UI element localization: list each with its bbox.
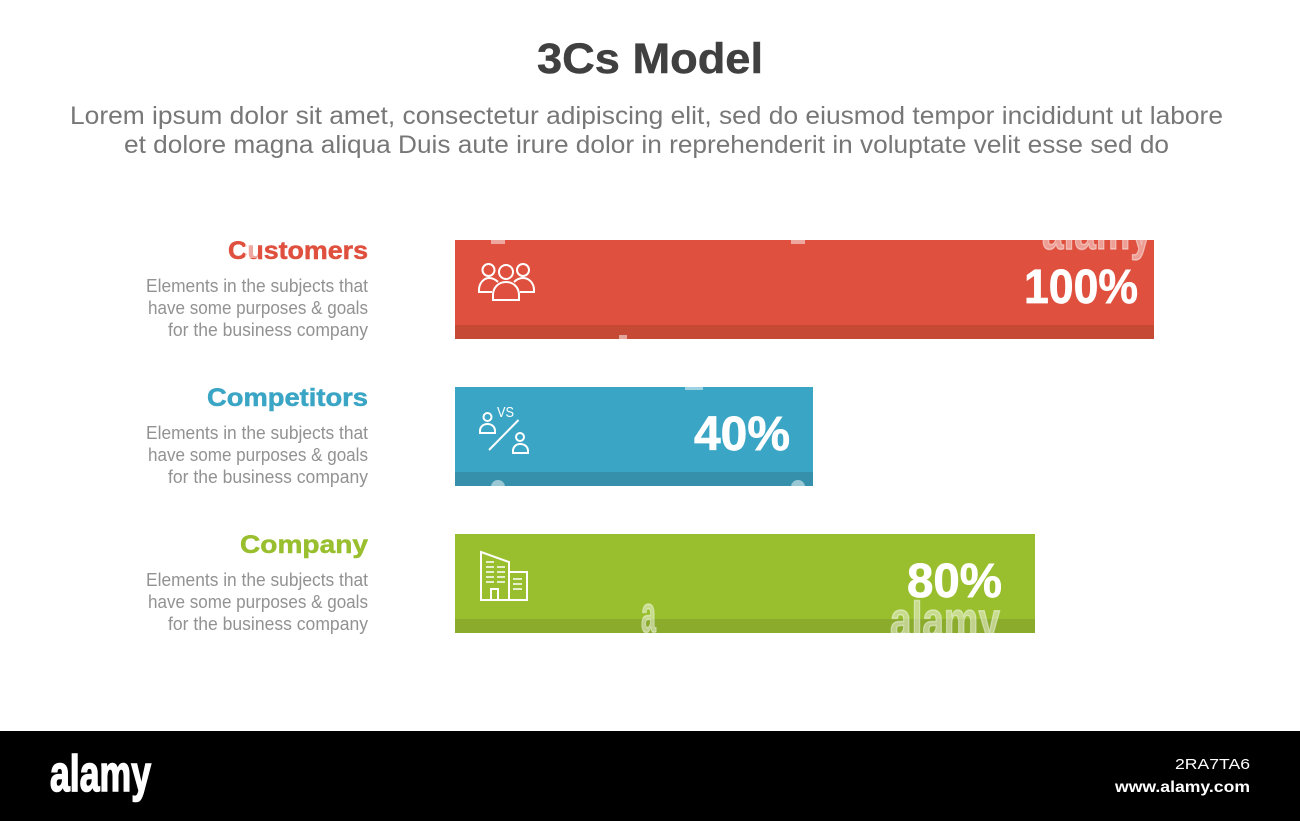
icon: group of people (479, 264, 534, 300)
watermark fragment over heading (245, 243, 258, 258)
subtitle text block (70, 102, 1223, 159)
description: company (146, 569, 369, 634)
description: competitors (146, 422, 369, 487)
description: competitors: Elements in the subjects that (146, 422, 368, 443)
heading: company: Company (240, 531, 368, 559)
description: competitors: for the business company (168, 466, 369, 487)
description: company: Elements in the subjects that (146, 569, 368, 590)
heading: competitors: Competitors (207, 384, 368, 412)
subtitle text block: Lorem ipsum dolor sit amet, consectetur adipiscing elit, sed do eiusmod tempor incididunt ut labore (70, 102, 1223, 130)
footer band (0, 731, 1300, 821)
icon: person versus person (480, 413, 528, 453)
footer logo: alamy: alamy (50, 745, 151, 802)
panel: company (147, 534, 1035, 634)
image id: 2RA7TA6 (1175, 756, 1250, 773)
icon: office buildings (481, 552, 527, 600)
bar: company 80%: alamy (890, 592, 1000, 650)
description: company: have some purposes & goals (148, 591, 368, 612)
value: 100%: 100% (1024, 261, 1138, 314)
bar: customers 100% (455, 240, 1154, 339)
description: company: for the business company (168, 613, 369, 634)
description: competitors: have some purposes & goals (148, 444, 368, 465)
bar: company 80% (455, 534, 1035, 633)
website: www.alamy.com (1114, 779, 1250, 796)
bar: customers 100%: alamy (1042, 203, 1152, 261)
icon label: VS: VS (497, 404, 514, 421)
title: 3Cs Model (537, 35, 763, 83)
panel: customers (147, 240, 1154, 340)
bar: company 80%: a (641, 586, 657, 644)
subtitle text block: et dolore magna aliqua Duis aute irure dolor in reprehenderit in voluptate velit esse sed do (124, 131, 1169, 159)
heading: customers: Customers (228, 237, 368, 265)
panel: competitors (146, 384, 813, 494)
bar: competitors 40% (455, 387, 813, 494)
description: customers: have some purposes & goals (148, 297, 368, 318)
value: 80%: 80% (907, 555, 1002, 608)
description: customers: Elements in the subjects that (146, 275, 368, 296)
description: customers (146, 275, 369, 340)
value: 40%: 40% (694, 408, 790, 461)
description: customers: for the business company (168, 319, 369, 340)
